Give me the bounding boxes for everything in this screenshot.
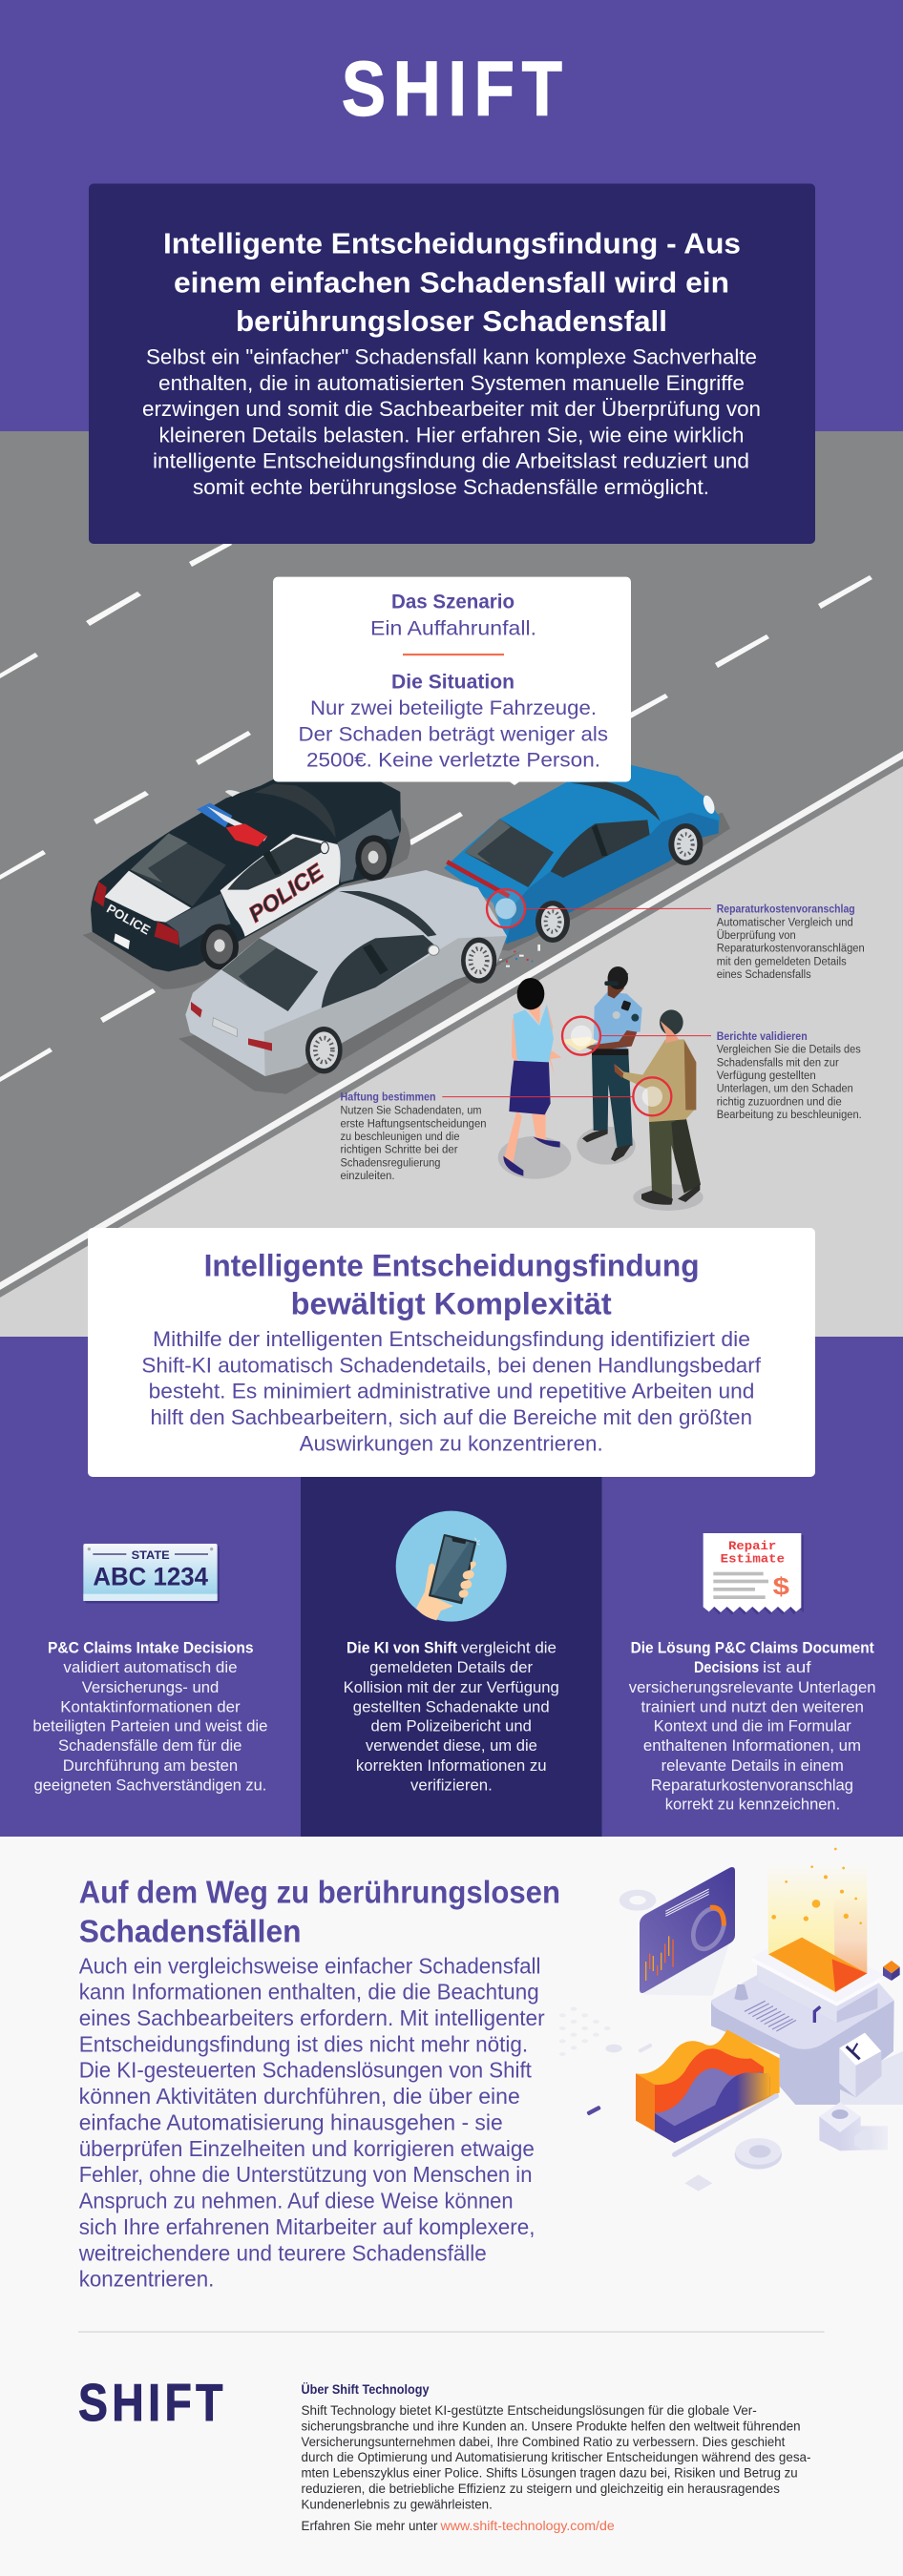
small cube (883, 1961, 900, 1981)
background: purple solutions band (0, 1337, 903, 1837)
illustration: police car and silver car (83, 778, 522, 1094)
cube with hole (819, 2102, 888, 2150)
callout: Berichte validieren: Berichte validieren (717, 1031, 808, 1043)
icon: license plate: STATE (132, 1548, 170, 1562)
complexity heading: bewältigt Komplexität (291, 1286, 612, 1320)
column text: Die KI von Shift: dem Polizeibericht und (370, 1717, 532, 1735)
column text: P&C Claims Intake Decisions: P&C Claims Intake Decisions (48, 1639, 254, 1657)
intro heading: berührungsloser Schadensfall (236, 304, 667, 338)
callout: Reparaturkostenvoranschlag: eines Schadensfalls (717, 969, 811, 981)
callout: Haftung bestimmen (340, 1092, 487, 1182)
column text: Die Lösung P&C Claims Document Decisions: enthaltenen Informationen, um (643, 1736, 861, 1755)
body text: touchless claims: können Aktivitäten durchführen, die über eine (79, 2084, 520, 2109)
diamond tile (684, 2174, 712, 2192)
intro body text: Selbst ein "einfacher" Schadensfall kann komplexe Sachverhalte (146, 345, 757, 369)
icon: license plate: ABC 1234 (93, 1562, 208, 1590)
callout: Berichte validieren (717, 1031, 862, 1121)
body text: touchless claims (78, 1953, 545, 2292)
callout: Berichte validieren: Bearbeitung zu beschleunigen. (717, 1110, 862, 1121)
dashboard panel (640, 1867, 735, 1996)
complexity body: besteht. Es minimiert administrative und repetitive Arbeiten und (149, 1380, 754, 1403)
gear (735, 2138, 782, 2170)
column text: Die Lösung P&C Claims Document Decisions: versicherungsrelevante Unterlagen (629, 1678, 876, 1696)
callout: Reparaturkostenvoranschlag (717, 904, 865, 981)
callout: Haftung bestimmen: richtigen Schritte bei der (340, 1145, 458, 1156)
icon: repair estimate receipt: $ (773, 1571, 790, 1600)
column text: Die Lösung P&C Claims Document Decisions: Kontext und die im Formular (654, 1717, 851, 1735)
logo: SHIFT footer: SHIFT (78, 2373, 227, 2432)
callout: Reparaturkostenvoranschlag: mit den gemeldeten Details (717, 956, 847, 967)
column text: Die Lösung P&C Claims Document Decisions (629, 1639, 876, 1814)
woman (503, 978, 561, 1176)
body text: touchless claims: sich Ihre erfahrenen Mitarbeiter auf komplexere, (79, 2214, 535, 2239)
body text: touchless claims: überprüfen Einzelheiten und korrigieren etwaige (79, 2136, 535, 2161)
body text: touchless claims: Auch ein vergleichsweise einfacher Schadensfall (79, 1953, 540, 1978)
heading: Auf dem Weg zu berührungslosen Schadensfällen (79, 1875, 560, 1948)
column text: Die KI von Shift: verifizieren. (410, 1776, 493, 1794)
intro body text: somit echte berührungslose Schadensfälle ermöglicht. (193, 475, 709, 499)
column text: P&C Claims Intake Decisions: geeigneten Sachverständigen zu. (34, 1776, 266, 1794)
decorative ring and dots (559, 1890, 656, 2056)
column text: Die Lösung P&C Claims Document Decisions: Die Lösung P&C Claims Document (631, 1639, 874, 1657)
icon: hand holding phone (396, 1511, 507, 1622)
column text: P&C Claims Intake Decisions: beteiligten Parteien und weist die (32, 1717, 268, 1735)
situation heading and text (298, 672, 608, 771)
body text: touchless claims: Anspruch zu nehmen. Auf diese Weise können (79, 2189, 514, 2213)
column text: Die Lösung P&C Claims Document Decisions: trainiert und nutzt den weiteren (641, 1697, 864, 1715)
about: Über Shift Technology: reduzieren, die betriebliche Effizienz zu steigern und gleichzeitig ein herausragendes (302, 2481, 780, 2496)
column text: Die KI von Shift: vergleicht die (461, 1639, 556, 1657)
scenario heading and text: Das Szenario (391, 592, 514, 613)
column text: P&C Claims Intake Decisions (32, 1639, 268, 1794)
callout: Berichte validieren: Unterlagen, um den Schaden (717, 1084, 853, 1095)
complexity body: Shift-KI automatisch Schadendetails, bei denen Handlungsbedarf (141, 1353, 762, 1377)
about: Über Shift Technology: Versicherungsunternehmen dabei, Ihre Combined Ratio zu verbessern. Dies geschieht (302, 2434, 785, 2449)
situation heading and text: Die Situation (391, 672, 514, 694)
road scene background (0, 431, 903, 1337)
about: Über Shift Technology: Shift Technology bietet KI-gestützte Entscheidungslösungen für die globale Ver- (302, 2402, 757, 2418)
complexity body: hilft den Sachbearbeitern, sich auf die Bereiche mit den größten (151, 1405, 752, 1429)
machine base (711, 1975, 903, 2105)
panel: intro (89, 183, 815, 544)
intro heading: einem einfachen Schadensfall wird ein (174, 265, 729, 299)
column text: P&C Claims Intake Decisions: Versicherungs- und (82, 1678, 219, 1696)
complexity heading (204, 1248, 700, 1320)
callout: Reparaturkostenvoranschlag: Reparaturkostenvoranschlägen (717, 944, 865, 955)
icon: repair estimate receipt: Repair (728, 1539, 776, 1553)
wave data block (636, 2029, 780, 2143)
body text: touchless claims: konzentrieren. (79, 2267, 214, 2292)
illustration: blue car (444, 764, 730, 967)
about: Über Shift Technology: durch die Optimierung und Automatisierung kritischer Entscheidungen während des gesa- (302, 2449, 811, 2464)
callout: Haftung bestimmen: Nutzen Sie Schadendaten, um (340, 1106, 481, 1117)
situation heading and text: Der Schaden beträgt weniger als (298, 723, 608, 745)
label box with logo (839, 2033, 881, 2097)
body text: touchless claims: weitreichendere und teurere Schadensfälle (78, 2240, 487, 2265)
about: Über Shift Technology: mten Lebenszyklus einer Police. Shifts Lösungen tragen dazu bei, Risiken und Betrug zu (302, 2465, 798, 2481)
heading: Auf dem Weg zu berührungslosen Schadensfällen: Auf dem Weg zu berührungslosen (79, 1875, 560, 1910)
column text: Die Lösung P&C Claims Document Decisions: relevante Details in einem (662, 1756, 844, 1775)
column text: Die KI von Shift: korrekten Informationen zu (356, 1756, 547, 1775)
column text: P&C Claims Intake Decisions: Schadensfälle dem für die (58, 1736, 242, 1755)
callout markers: red circles and leader lines (442, 889, 711, 1115)
callout: Berichte validieren: Verfügung gestellten (717, 1070, 816, 1082)
about: Über Shift Technology: Über Shift Technology (302, 2381, 430, 2397)
complexity heading: Intelligente Entscheidungsfindung (204, 1248, 700, 1282)
body text: touchless claims: Fehler, ohne die Unterstützung von Menschen in (79, 2162, 532, 2187)
scenario heading and text (370, 592, 536, 640)
callout: Haftung bestimmen: einzuleiten. (340, 1171, 395, 1182)
intro body text: kleineren Details belasten. Hier erfahren Sie, wie eine wirklich (158, 423, 744, 447)
icon: license plate (83, 1544, 220, 1604)
panel: complexity (88, 1228, 815, 1477)
intro body text (142, 345, 761, 499)
about: Über Shift Technology: www.shift-technology.com/de (439, 2518, 615, 2533)
ground shadows (498, 1127, 704, 1211)
callout: Reparaturkostenvoranschlag: Automatischer Vergleich und (717, 917, 853, 928)
column text: Die Lösung P&C Claims Document Decisions: ist auf (763, 1658, 811, 1676)
complexity body (141, 1327, 762, 1455)
column text: Die KI von Shift: gemeldeten Details der (369, 1658, 533, 1676)
callout: Reparaturkostenvoranschlag: Überprüfung von (717, 930, 796, 942)
small bolts (586, 2043, 653, 2116)
column text: Die Lösung P&C Claims Document Decisions: Decisions (694, 1658, 759, 1676)
illustration: police car and silver car: POLICE (104, 902, 153, 938)
man (614, 1009, 701, 1205)
column text: P&C Claims Intake Decisions: validiert automatisch die (63, 1658, 238, 1676)
complexity body: Auswirkungen zu konzentrieren. (300, 1431, 603, 1455)
icon: repair estimate receipt (704, 1533, 804, 1614)
intro heading (163, 227, 741, 338)
situation heading and text: Nur zwei beteiligte Fahrzeuge. (310, 697, 597, 719)
column text: P&C Claims Intake Decisions: Durchführung am besten (63, 1756, 238, 1775)
complexity body: Mithilfe der intelligenten Entscheidungsfindung identifiziert die (153, 1327, 750, 1351)
callout: Berichte validieren: Schadensfalls mit den zur (717, 1057, 839, 1069)
situation heading and text: 2500€. Keine verletzte Person. (306, 749, 600, 771)
column text: Die Lösung P&C Claims Document Decisions: korrekt zu kennzeichnen. (665, 1796, 840, 1814)
about: Über Shift Technology: Kundenerlebnis zu gewährleisten. (302, 2496, 493, 2511)
intro body text: intelligente Entscheidungsfindung die Arbeitslast reduziert und (153, 449, 749, 473)
logo: SHIFT header: SHIFT (342, 45, 570, 132)
body text: touchless claims: eines Sachbearbeiters erfordern. Mit intelligenter (79, 2005, 545, 2030)
about: Über Shift Technology: Erfahren Sie mehr unter (302, 2518, 438, 2533)
background: purple header band (0, 0, 903, 431)
column text: Die KI von Shift: Die KI von Shift (346, 1639, 457, 1657)
illustration: isometric data machine (559, 1848, 903, 2192)
body text: touchless claims: kann Informationen enthalten, die die Beachtung (79, 1980, 539, 2005)
intro body text: enthalten, die in automatisierten Systemen manuelle Eingriffe (158, 371, 745, 395)
conveyor (675, 2096, 776, 2154)
callout: Berichte validieren: Vergleichen Sie die Details des (717, 1045, 861, 1056)
column text: Die KI von Shift: gestellten Schadenakte und (353, 1697, 550, 1715)
column text: Die KI von Shift: Kollision mit der zur Verfügung (344, 1678, 559, 1696)
column text: Die Lösung P&C Claims Document Decisions: Reparaturkostenvoranschlag (651, 1776, 853, 1794)
body text: touchless claims: Entscheidungsfindung ist dies nicht mehr nötig. (79, 2031, 528, 2056)
upper tray and glowing tank (751, 1848, 885, 2023)
illustration: woman, police officer and man (498, 966, 704, 1211)
callout: Haftung bestimmen: Schadensregulierung (340, 1157, 441, 1169)
officer (560, 966, 642, 1161)
illustration: police car and silver car: POLICE (244, 859, 329, 926)
callout: Haftung bestimmen: Haftung bestimmen (340, 1092, 435, 1104)
intro body text: erzwingen und somit die Sachbearbeiter mit der Überprüfung von (142, 397, 761, 421)
callout: Haftung bestimmen: zu beschleunigen und die (340, 1132, 460, 1143)
body text: touchless claims: Die KI-gesteuerten Schadenslösungen von Shift (79, 2058, 532, 2083)
callout: Berichte validieren: richtig zuzuordnen und die (717, 1096, 842, 1108)
about: Über Shift Technology (302, 2381, 811, 2533)
panel: Szenario and Situation (273, 577, 631, 785)
body text: touchless claims: einfache Automatisierung hinausgehen - sie (79, 2109, 503, 2134)
background: dark middle column (301, 1477, 601, 1837)
callout: Reparaturkostenvoranschlag: Reparaturkostenvoranschlag (717, 904, 855, 916)
column text: P&C Claims Intake Decisions: Kontaktinformationen der (60, 1697, 241, 1715)
icon: repair estimate receipt: Estimate (721, 1552, 785, 1567)
heading: Auf dem Weg zu berührungslosen Schadensfällen: Schadensfällen (79, 1913, 302, 1948)
callout: Haftung bestimmen: erste Haftungsentscheidungen (340, 1118, 487, 1130)
column text: Die KI von Shift: verwendet diese, um die (366, 1736, 537, 1755)
scenario heading and text: Ein Auffahrunfall. (370, 618, 536, 640)
about: Über Shift Technology: sicherungsbranche und ihre Kunden an. Unsere Produkte helfen den weltweit führenden (302, 2418, 801, 2433)
column text: Die KI von Shift (344, 1639, 559, 1794)
intro heading: Intelligente Entscheidungsfindung - Aus (163, 227, 741, 260)
